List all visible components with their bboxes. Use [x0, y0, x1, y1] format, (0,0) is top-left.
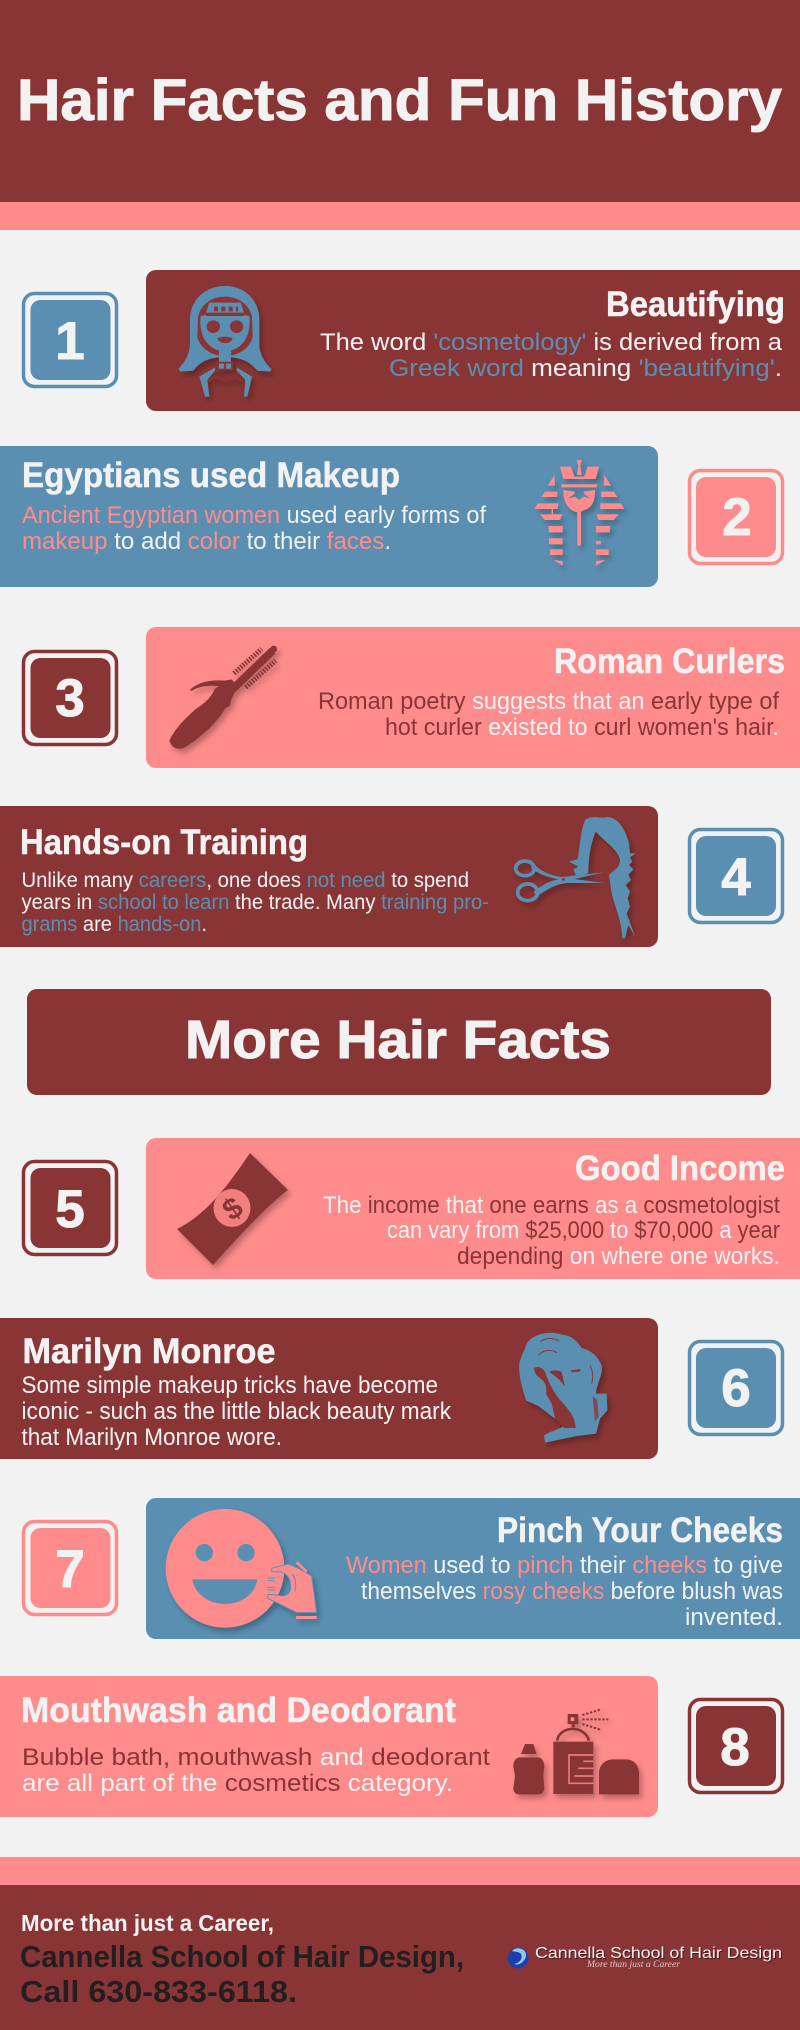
panel: Pinch Your Cheeks — [146, 1498, 800, 1639]
heading: Good Income: Good Income — [575, 1149, 785, 1188]
number badge 6: 6 — [721, 1359, 751, 1418]
panel: Beautifying — [146, 270, 800, 411]
text block: Hands-on Training: Unlike many careers, one does not need to spend — [22, 869, 469, 892]
footer call to action: Call 630-833-6118. — [20, 1974, 297, 2009]
text block: Egyptians: makeup to add color to their faces. — [22, 528, 391, 555]
section banner: More Hair Facts — [27, 989, 771, 1095]
number badge 1: 1 — [55, 312, 85, 371]
fact row 8: Mouthwash and Deodorant — [0, 1676, 782, 1817]
number badge 7: 7 — [55, 1540, 85, 1599]
heading: Beautifying: Beautifying — [606, 285, 785, 324]
text block: Mouthwash and Deodorant: Bubble bath, mouthwash and deodorant — [22, 1744, 490, 1771]
footer call to action: Cannella School of Hair Design, — [20, 1939, 464, 1974]
icon: scissors and hair — [516, 817, 636, 938]
fact row 7: Pinch Your Cheeks — [24, 1498, 800, 1639]
panel: Marilyn Monroe — [0, 1318, 658, 1459]
heading: Roman Curlers: Roman Curlers — [554, 642, 785, 681]
footer tagline: More than just a Career, — [21, 1910, 274, 1936]
fact row 2: Egyptians used Makeup — [0, 446, 782, 587]
text block: Good Income: can vary from $25,000 to $70,000 a year — [387, 1217, 780, 1244]
icon: dollar bill — [177, 1153, 288, 1265]
icon: pharaoh mask — [534, 460, 624, 566]
text block: Beautifying: Greek word meaning 'beautifying' . — [389, 355, 782, 382]
icon: Marilyn Monroe portrait — [519, 1333, 607, 1443]
text block: Hands-on Training: grams are hands-on. — [22, 913, 207, 936]
text block: Roman Curlers: hot curler existed to curl women's hair. — [385, 714, 779, 741]
heading: Egyptians used Makeup: Egyptians used Makeup — [22, 456, 400, 495]
fact row 1: Beautifying — [24, 270, 800, 411]
number badge 4: 4 — [721, 848, 751, 907]
panel: Good Income — [146, 1138, 800, 1279]
fact row 6: Marilyn Monroe — [0, 1318, 782, 1459]
text block: Beautifying — [320, 329, 783, 382]
text block: Marilyn Monroe — [22, 1372, 452, 1451]
number badge 6 — [690, 1342, 782, 1434]
number badge 7 — [24, 1522, 116, 1614]
icon: woman with hood — [178, 286, 272, 397]
fact row 3: Roman Curlers — [24, 627, 800, 768]
text block: Egyptians: Ancient Egyptian women used early forms of — [22, 502, 486, 529]
number badge 5 — [24, 1162, 116, 1254]
text block: Hands-on Training: years in school to learn the trade. Many training pro- — [22, 891, 489, 914]
fact row 5: Good Income — [24, 1138, 800, 1279]
title: Hair Facts and Fun History — [17, 68, 782, 133]
text block: Mouthwash and Deodorant — [22, 1744, 490, 1797]
number badge 8 — [690, 1700, 782, 1792]
text block: Pinch Your Cheeks: Women used to pinch their cheeks to give — [346, 1552, 783, 1579]
heading: Mouthwash and Deodorant: Mouthwash and Deodorant — [21, 1691, 456, 1730]
icon: dollar bill: $ — [217, 1191, 249, 1228]
logo: Cannella School of Hair Design: Cannella School of Hair Design — [535, 1945, 782, 1962]
number badge 5: 5 — [55, 1180, 85, 1239]
text block: Pinch Your Cheeks — [346, 1552, 783, 1631]
heading: Marilyn Monroe: Marilyn Monroe — [22, 1332, 276, 1371]
text block: Mouthwash and Deodorant: are all part of the cosmetics category. — [22, 1770, 453, 1797]
number badge 3 — [24, 652, 116, 744]
logo: Cannella School of Hair Design: Cannella School of Hair Design — [536, 1946, 783, 1963]
number badge 2 — [690, 470, 782, 564]
text block: Marilyn Monroe: iconic - such as the little black beauty mark — [22, 1398, 452, 1425]
text block: Beautifying: The word 'cosmetology' is derived from a — [320, 329, 783, 356]
text block: Marilyn Monroe: Some simple makeup tricks have become — [22, 1372, 438, 1399]
text block: Marilyn Monroe: that Marilyn Monroe wore. — [22, 1424, 282, 1451]
number badge 3: 3 — [55, 669, 85, 728]
heading: Hands-on Training: Hands-on Training — [20, 823, 308, 862]
panel: Hands-on Training — [0, 806, 658, 947]
text block: Roman Curlers — [318, 688, 779, 741]
text block: Good Income — [323, 1192, 780, 1270]
panel: Roman Curlers — [146, 627, 800, 768]
section heading: More Hair Facts — [185, 1010, 611, 1070]
text block: Hands-on Training — [22, 869, 489, 936]
number badge 1 — [24, 294, 116, 386]
text block: Good Income: The income that one earns as a cosmetologist — [323, 1192, 780, 1219]
header banner — [0, 0, 800, 230]
icon: smiling face pinching cheek — [166, 1509, 317, 1628]
number badge 8: 8 — [720, 1718, 750, 1777]
fact row 4: Hands-on Training — [0, 806, 782, 947]
logo: Cannella School of Hair Design: More than just a Career — [586, 1960, 680, 1970]
icon: cosmetics bottles — [513, 1709, 639, 1794]
panel: Egyptians used Makeup — [0, 446, 658, 587]
text block: Pinch Your Cheeks: invented. — [685, 1604, 783, 1631]
text block: Egyptians — [22, 502, 486, 555]
footer call to action — [20, 1939, 464, 2009]
number badge 4 — [690, 830, 782, 922]
text block: Good Income: depending on where one works. — [457, 1243, 780, 1270]
logo: Cannella School of Hair Design — [508, 1945, 783, 1970]
footer — [0, 1857, 800, 2030]
number badge 2: 2 — [722, 488, 752, 547]
panel: Mouthwash and Deodorant — [0, 1676, 658, 1817]
icon: curling iron — [169, 646, 277, 749]
text block: Roman Curlers: Roman poetry suggests that an early type of — [318, 688, 779, 715]
text block: Pinch Your Cheeks: themselves rosy cheeks before blush was — [361, 1578, 783, 1605]
